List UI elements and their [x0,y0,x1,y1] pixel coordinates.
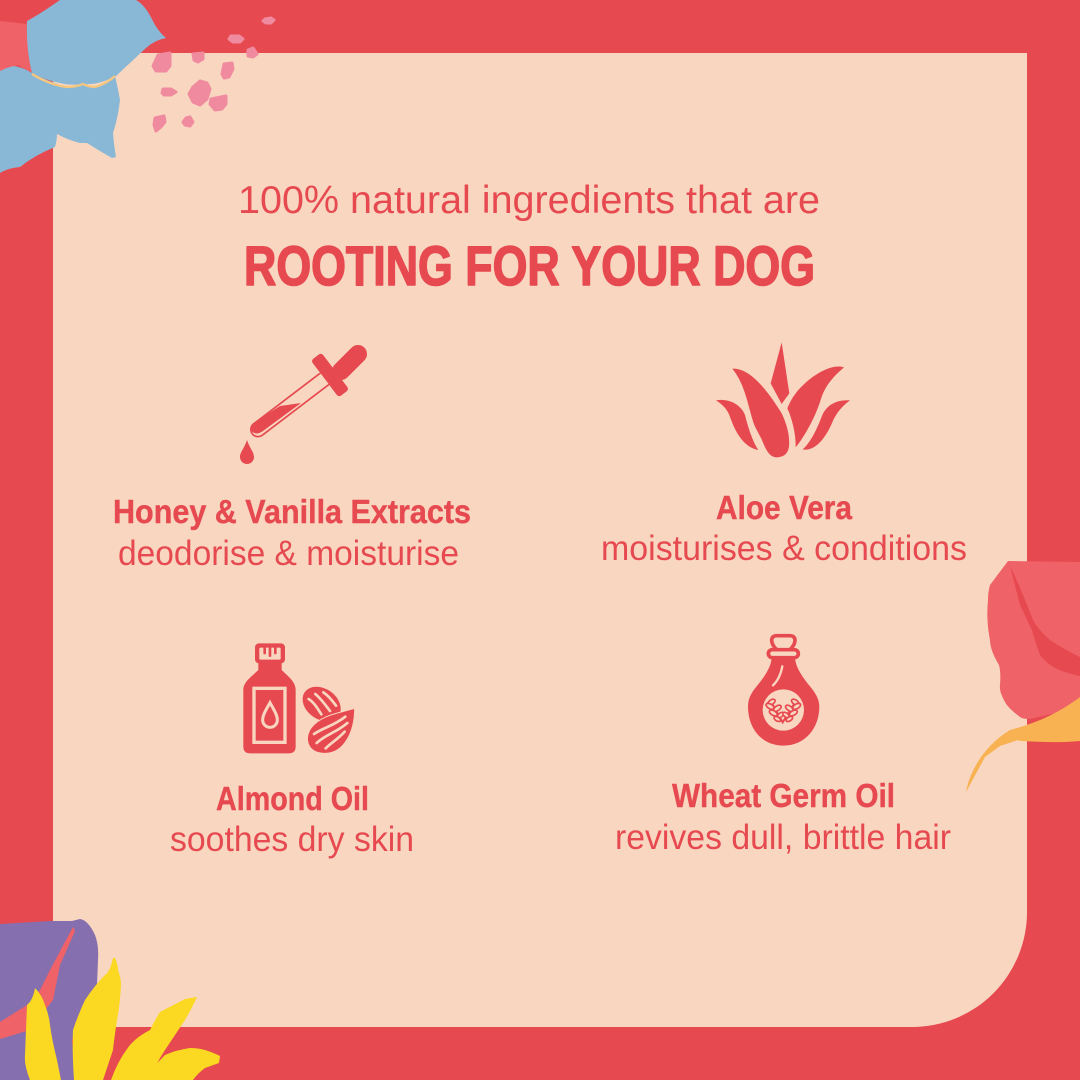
label: honey and vanilla [113,493,471,573]
title: ROOTING FOR YOUR DOG [244,234,815,297]
icon: wheat germ oil bottle [748,636,819,746]
decoration: right coral leaf [966,561,1080,792]
label: honey and vanilla: Honey & Vanilla Extracts [113,493,471,530]
decoration: pink speckles [153,18,274,131]
decoration: bottom-left leaves [0,919,220,1080]
label: wheat germ oil: Wheat Germ Oil [672,777,895,814]
label: almond oil: Almond Oil [216,780,369,817]
icon: dropper [240,353,358,464]
decoration: top-left leaves [0,0,166,173]
heading line: 100% natural ingredients that are [238,179,820,222]
icon: almond oil bottle [243,643,355,753]
label: honey and vanilla: deodorise & moisturise [118,534,459,573]
icon: aloe vera [716,342,850,457]
label: wheat germ oil [615,777,951,857]
label: aloe vera [601,489,967,568]
label: almond oil: soothes dry skin [170,820,414,859]
label: aloe vera: Aloe Vera [716,489,853,526]
label: wheat germ oil: revives dull, brittle hair [615,818,951,857]
label: almond oil [170,780,414,859]
label: aloe vera: moisturises & conditions [601,529,967,568]
